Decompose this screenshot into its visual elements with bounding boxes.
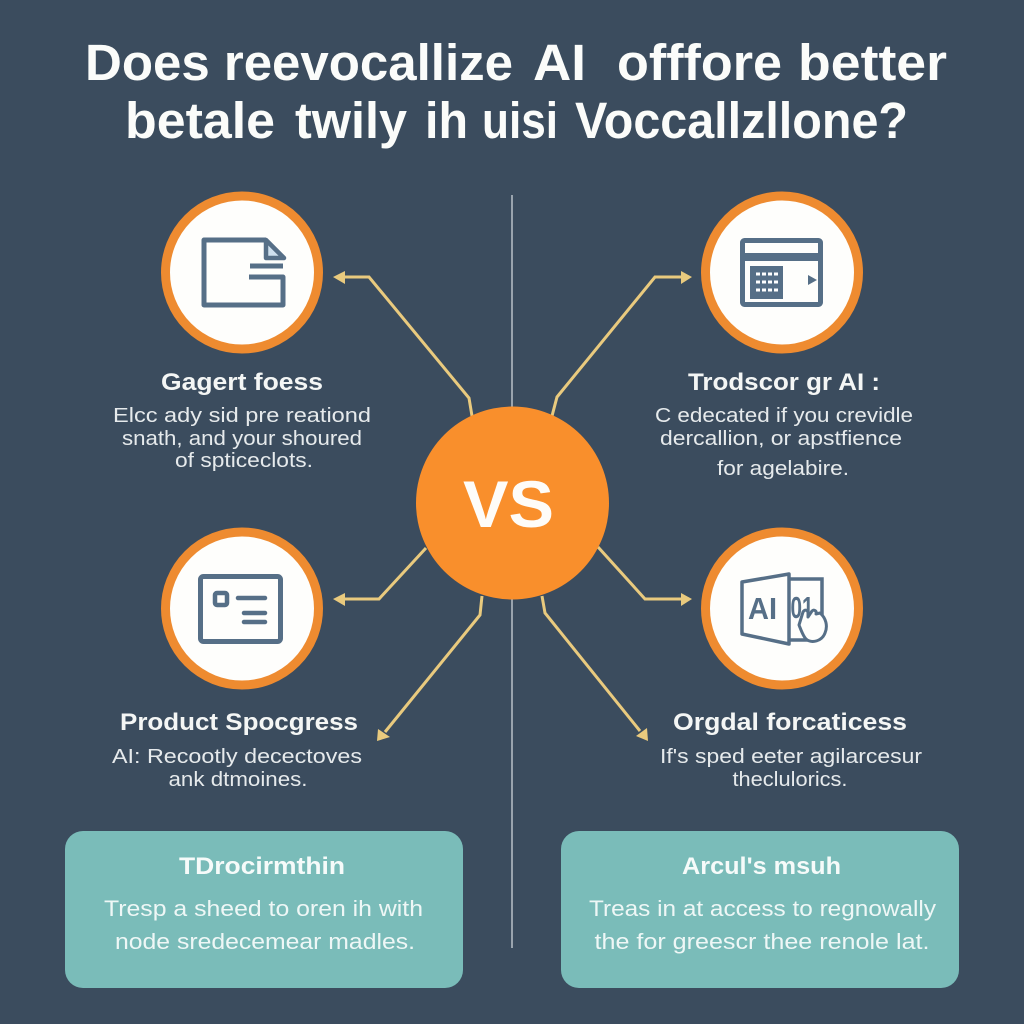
body text: If's sped eeter agilarcesur: [660, 745, 922, 768]
callout text: Treas in at access to regnowally: [589, 896, 936, 921]
icon: AI document with hand: 01: [790, 590, 814, 625]
title: Voccallzllone?: [575, 92, 908, 149]
body text: [655, 404, 913, 480]
heading: Trodscor gr AI :: [688, 369, 880, 396]
heading: Product Spocgress: [120, 709, 358, 736]
title: [85, 34, 947, 149]
title: Does reevocallize: [85, 34, 513, 91]
body text: of spticeclots.: [175, 449, 313, 472]
center VS badge: [416, 406, 609, 600]
body text: [112, 745, 362, 791]
arrow: center to top left: [333, 271, 472, 416]
body text: Elcc ady sid pre reationd: [113, 404, 371, 427]
body text: dercallion, or apstfience: [660, 427, 902, 450]
panel: top left item: [113, 196, 371, 472]
callout text: Tresp a sheed to oren ih with: [104, 896, 423, 921]
body text: [113, 404, 371, 472]
icon: calendar window: [706, 196, 858, 349]
arrow: center to lower right: [542, 596, 648, 741]
heading: Orgdal forcaticess: [673, 709, 907, 736]
icon: AI document with hand: AI: [748, 591, 777, 626]
title: better: [798, 34, 947, 91]
body text: theclulorics.: [732, 768, 848, 791]
body text: AI: Recootly decectoves: [112, 745, 362, 768]
arrow: center to top right: [552, 271, 692, 416]
icon: id card: [166, 532, 318, 685]
icon: AI document with hand: [706, 532, 858, 685]
callout text: [589, 896, 936, 954]
panel: top right item: [655, 196, 913, 480]
title: ih: [425, 92, 468, 149]
callout text: the for greescr thee renole lat.: [594, 929, 930, 954]
arrow: center to middle right: [598, 547, 692, 606]
body text: [660, 745, 922, 791]
arrow: center to middle left: [333, 548, 426, 606]
callout text: node sredecemear madles.: [115, 929, 415, 954]
body text: snath, and your shoured: [122, 427, 362, 450]
arrow: center to lower left: [377, 596, 482, 741]
body text: for agelabire.: [717, 457, 849, 480]
title: betale: [125, 92, 275, 149]
title: uisi: [482, 92, 558, 149]
callout heading: Arcul's msuh: [682, 853, 841, 880]
title: AI: [533, 34, 586, 91]
center VS badge: VS: [463, 467, 554, 541]
center divider: [511, 195, 513, 948]
title: twily: [295, 92, 408, 149]
callout heading: TDrocirmthin: [179, 853, 345, 880]
icon: document: [166, 196, 318, 349]
panel: lower right item: [660, 532, 922, 791]
title: offfore: [617, 34, 782, 91]
callout text: [104, 896, 423, 954]
panel: lower left item: [112, 532, 362, 791]
panel: bottom left callout: [65, 831, 463, 988]
heading: Gagert foess: [161, 369, 323, 396]
body text: ank dtmoines.: [168, 768, 308, 791]
body text: C edecated if you crevidle: [655, 404, 913, 427]
panel: bottom right callout: [561, 831, 959, 988]
